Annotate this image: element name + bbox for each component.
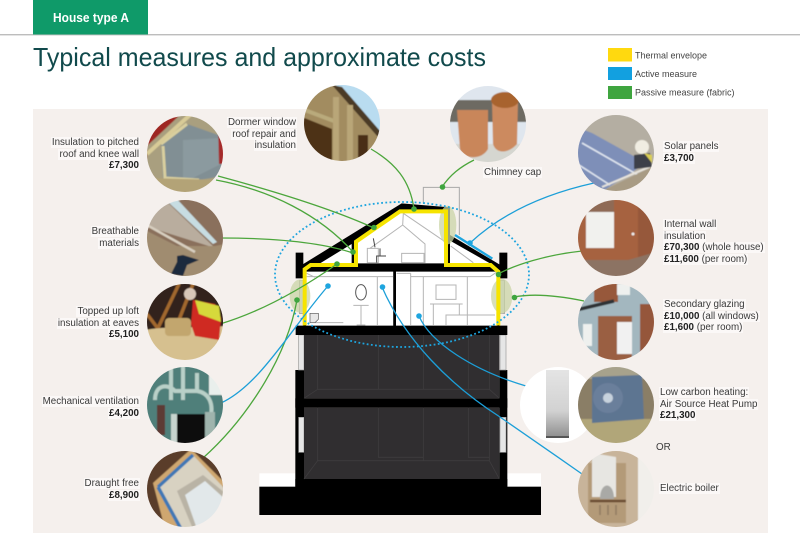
house cross-section: top floor and attic (290, 187, 512, 335)
photo: internal wall insulation (576, 198, 656, 278)
label: topped up loft insulation (57, 306, 140, 340)
white rooms (306, 213, 497, 326)
label: secondary glazing: Secondary glazing (664, 299, 745, 310)
photo: chimney cap (448, 84, 528, 164)
connector lines: passive (203, 149, 584, 458)
label: dormer window: insulation (255, 140, 296, 151)
solar strip (455, 235, 492, 259)
house cross-section: lower floors (259, 335, 541, 515)
thermal envelope ellipse (275, 202, 529, 347)
label: dormer window: Dormer window (228, 117, 296, 128)
photo: breathable materials (145, 198, 225, 278)
label: low carbon heating: Air Source Heat Pump (660, 398, 757, 410)
photo: hot water cylinder (520, 367, 596, 443)
label: mechanical ventilation (42, 396, 140, 419)
label: topped up loft insulation: insulation at eaves (58, 318, 139, 328)
label: dormer window (227, 117, 297, 151)
legend: Active measure (635, 69, 697, 79)
roof and walls (296, 203, 507, 335)
legend: Passive measure (fabric) (635, 88, 735, 98)
label: or: OR (656, 442, 671, 453)
background panel (33, 109, 768, 533)
label: low carbon heating: £21,300 (660, 410, 695, 421)
connector lines: active (221, 183, 594, 474)
label: mechanical ventilation: £4,200 (109, 408, 139, 418)
label: pitched roof insulation: roof and knee wall (59, 148, 139, 160)
label: pitched roof insulation (51, 137, 140, 171)
title: Typical measures and approximate costs (33, 42, 486, 72)
photo: dormer window (302, 83, 382, 163)
chimney outline (423, 187, 459, 235)
label: pitched roof insulation: Insulation to pitched (52, 137, 139, 148)
partition (393, 271, 396, 326)
tab: house type: House type A (53, 11, 129, 25)
photo: pitched roof insulation (145, 114, 225, 194)
green highlight areas (290, 206, 512, 313)
photo: solar panels (576, 113, 656, 193)
label: secondary glazing (663, 299, 760, 333)
label: secondary glazing: £1,600 (per room) (664, 322, 742, 333)
label: topped up loft insulation: £5,100 (109, 329, 139, 340)
photo: draught free (145, 449, 225, 529)
label: internal wall insulation (663, 219, 765, 265)
label: low carbon heating (659, 387, 758, 421)
label: chimney cap: Chimney cap (484, 167, 541, 178)
label: breathable materials: materials (99, 238, 139, 248)
label: draught free: £8,900 (109, 490, 139, 500)
label: mechanical ventilation: Mechanical ventilation (43, 396, 139, 407)
label: draught free: Draught free (85, 478, 139, 489)
thermal envelope (305, 211, 498, 325)
legend: Thermal envelope (635, 50, 707, 60)
label: breathable materials: Breathable (92, 226, 139, 237)
window strips (299, 281, 505, 313)
label: topped up loft insulation: Topped up loft (77, 306, 139, 317)
label: solar panels (663, 141, 719, 164)
label: internal wall insulation: £70,300 (whole house) (664, 242, 764, 253)
photo: air source heat pump (576, 365, 656, 445)
photo: secondary glazing (576, 282, 656, 362)
label: secondary glazing: £10,000 (all windows) (664, 310, 759, 322)
interior line details (307, 213, 497, 325)
label: pitched roof insulation: £7,300 (109, 160, 139, 171)
photo: electric boiler (578, 451, 638, 527)
label: solar panels: £3,700 (664, 152, 694, 164)
label: breathable materials (91, 226, 140, 249)
label: draught free (84, 478, 140, 501)
label: dormer window: roof repair and (232, 128, 296, 140)
connector dots (294, 184, 517, 319)
photo: loft insulation at eaves (145, 282, 225, 362)
label: internal wall insulation: insulation (664, 230, 705, 242)
label: electric boiler: Electric boiler (660, 483, 719, 494)
photo: mechanical ventilation (147, 367, 223, 443)
label: internal wall insulation: Internal wall (664, 219, 716, 230)
label: internal wall insulation: £11,600 (per room) (664, 254, 747, 264)
label: solar panels: Solar panels (664, 141, 718, 152)
tab: house type (33, 0, 148, 34)
label: low carbon heating: Low carbon heating: (660, 387, 748, 398)
legend (608, 48, 735, 99)
